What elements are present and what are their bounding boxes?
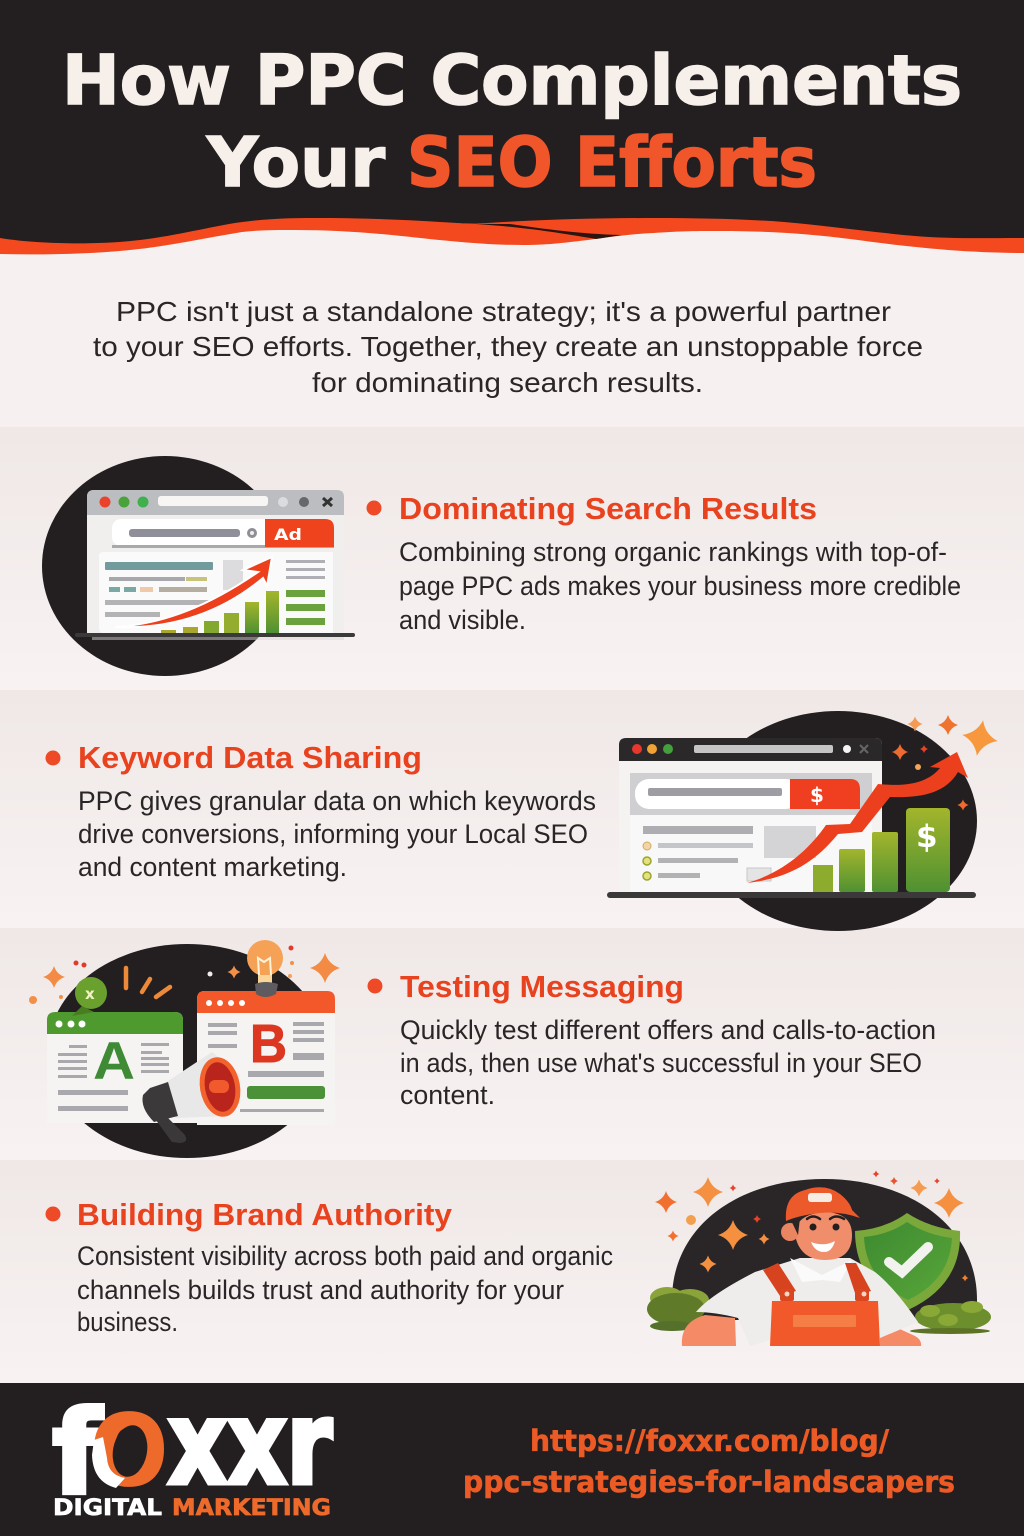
- orange wave ribbon: [0, 205, 1024, 257]
- cream edge under ribbon: [0, 230, 1024, 262]
- logo: o: [89, 1363, 169, 1517]
- card A: [47, 1012, 183, 1123]
- section background bands: [0, 427, 1024, 1383]
- dark wave wedge: [457, 223, 622, 239]
- title: Your: [206, 123, 385, 203]
- bullet: [46, 1206, 60, 1222]
- arms: [682, 1315, 736, 1346]
- panel: keyword data sharing text: drive conversions, informing your Local SEO: [78, 819, 588, 849]
- panel: dominating search results icon: [42, 456, 355, 676]
- logo: f: [52, 1386, 104, 1521]
- speech bubble: x: [85, 985, 95, 1003]
- bullet: [366, 500, 382, 516]
- panel: building brand authority text: Building Brand Authority: [77, 1197, 453, 1232]
- panel: building brand authority text: channels builds trust and authority for your: [77, 1275, 564, 1305]
- footer url: ppc-strategies-for-landscapers: [463, 1465, 955, 1499]
- speech bubble: [72, 977, 107, 1016]
- panel: testing messaging text: Testing Messaging: [400, 969, 684, 1004]
- light bulb: [247, 940, 283, 997]
- title: SEO Efforts: [407, 123, 817, 203]
- bullet: [46, 750, 60, 766]
- logo: [52, 1363, 332, 1521]
- intro text block: for dominating search results.: [312, 367, 703, 398]
- panel: dominating search results text: and visible.: [399, 605, 526, 635]
- cap: [786, 1187, 860, 1221]
- title: [62, 41, 962, 203]
- card B: [183, 991, 335, 1125]
- logo: DIGITAL: [53, 1496, 162, 1521]
- bushes: [647, 1287, 991, 1334]
- panel: keyword data sharing text: Keyword Data Sharing: [78, 740, 422, 775]
- panel: keyword data sharing text: [46, 740, 596, 882]
- panel: building brand authority text: [46, 1197, 613, 1337]
- megaphone: [142, 1052, 245, 1143]
- intro text block: PPC isn't just a standalone strategy; it's a powerful partner: [116, 296, 891, 327]
- panel: building brand authority text: Consistent visibility across both paid and organic: [77, 1241, 613, 1271]
- panel: testing messaging text: [368, 969, 936, 1110]
- panel: dominating search results text: Dominating Search Results: [399, 491, 817, 526]
- logo: MARKETING: [172, 1496, 331, 1521]
- bullet: [368, 978, 382, 994]
- panel: testing messaging text: Quickly test different offers and calls-to-action: [400, 1015, 936, 1045]
- footer url: [463, 1424, 955, 1499]
- panel: testing messaging icon: [29, 940, 340, 1158]
- fox tail ring detail: [92, 1422, 151, 1488]
- header panel with wave: [0, 0, 1024, 262]
- sparkles: [29, 946, 340, 1004]
- dollar label on bar: $: [916, 819, 938, 855]
- footer url: https://foxxr.com/blog/: [530, 1424, 889, 1458]
- sparkles: [655, 1170, 968, 1282]
- intro text block: [93, 296, 923, 398]
- overalls: [770, 1301, 880, 1346]
- panel: keyword data sharing icon: [607, 711, 1001, 931]
- panel: keyword data sharing text: and content marketing.: [78, 852, 347, 882]
- dollar label: $: [810, 783, 824, 807]
- logo: xxr: [168, 1377, 332, 1510]
- panel: building brand authority text: business.: [77, 1307, 178, 1337]
- shirt: [696, 1258, 918, 1346]
- panel: dominating search results text: [366, 491, 961, 635]
- face: [795, 1212, 852, 1260]
- panel: dominating search results text: page PPC ads makes your business more credible: [399, 571, 961, 601]
- intro text block: to your SEO efforts. Together, they create an unstoppable force: [93, 331, 923, 362]
- collar: [790, 1258, 852, 1282]
- card A: A: [93, 1032, 135, 1091]
- panel: keyword data sharing text: PPC gives granular data on which keywords: [78, 786, 596, 816]
- shield: [855, 1213, 960, 1310]
- panel: building brand authority icon: [647, 1170, 991, 1346]
- footer panel: [0, 1383, 1024, 1536]
- title: How PPC Complements: [62, 41, 962, 121]
- panel: dominating search results text: Combining strong organic rankings with top-of-: [399, 537, 947, 567]
- panel: testing messaging text: content.: [400, 1080, 495, 1110]
- card B: B: [250, 1014, 287, 1074]
- sparkles: [892, 715, 1001, 810]
- landscaper: [682, 1187, 921, 1346]
- panel: testing messaging text: in ads, then use what's successful in your SEO: [400, 1048, 922, 1078]
- ad label: Ad: [274, 525, 302, 544]
